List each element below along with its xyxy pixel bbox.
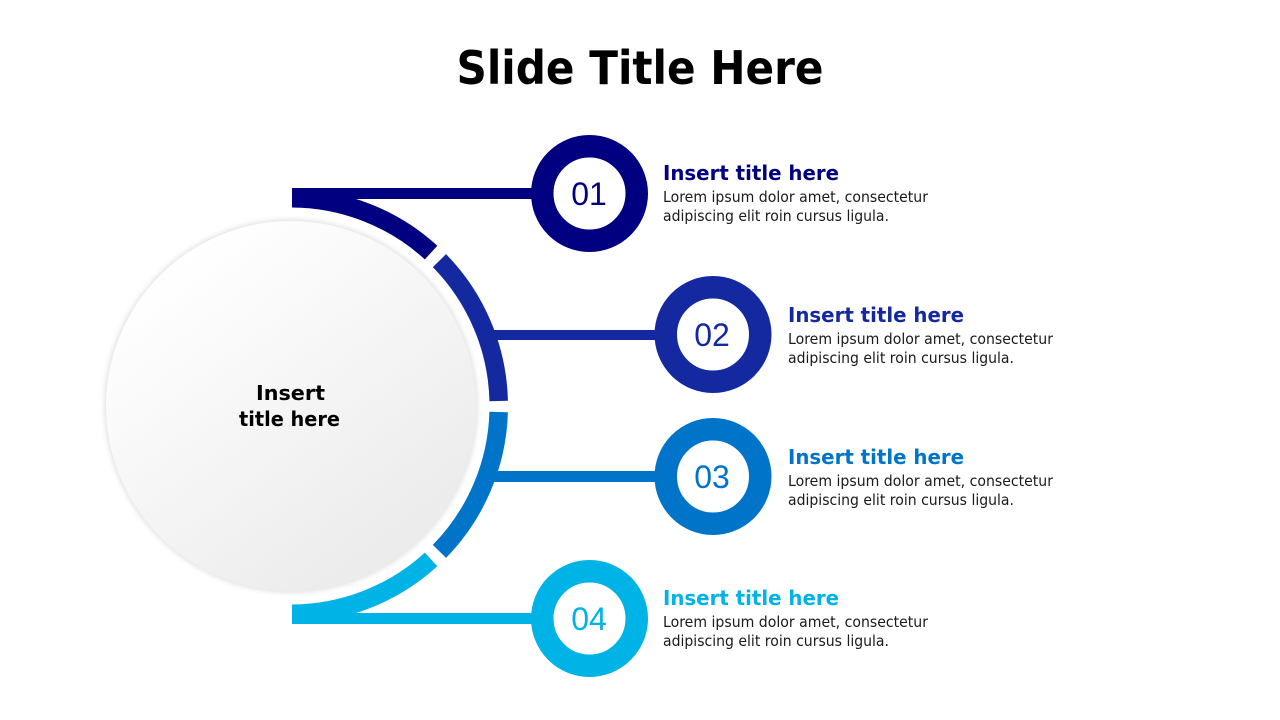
connector 01 (292, 188, 542, 199)
arc segment 02 (439, 261, 499, 401)
arc segment 04 (292, 559, 431, 614)
text block 03: Lorem ipsum dolor amet, consectetur (788, 472, 1054, 490)
ring 04 (542, 571, 637, 666)
number 04: 04 (571, 601, 607, 637)
item 02 (439, 261, 1054, 401)
text block 01 (663, 161, 929, 225)
text block 02 (788, 303, 1054, 367)
text block 02: Insert title here (788, 303, 964, 327)
item 01 (292, 146, 929, 253)
number 03: 03 (694, 459, 730, 495)
text block 01: adipiscing elit roin cursus ligula. (663, 207, 889, 225)
arc segment 03 (439, 412, 499, 551)
text block 03: adipiscing elit roin cursus ligula. (788, 491, 1014, 509)
text block 01: Lorem ipsum dolor amet, consectetur (663, 188, 929, 206)
text block 01: Insert title here (663, 161, 839, 185)
text block 02: Lorem ipsum dolor amet, consectetur (788, 330, 1054, 348)
text block 03: Insert title here (788, 445, 964, 469)
text block 03 (788, 445, 1054, 509)
central circle (105, 220, 477, 592)
central circle label: Insert (256, 381, 325, 405)
item 04 (292, 559, 929, 666)
number 02: 02 (694, 317, 730, 353)
connector 02 (490, 330, 665, 340)
text block 04: Insert title here (663, 586, 839, 610)
central circle label (239, 381, 340, 431)
ring 01 (542, 146, 637, 241)
number 01: 01 (571, 176, 607, 212)
central circle label: title here (239, 407, 340, 431)
ring 02 (666, 287, 760, 382)
item 03 (439, 412, 1054, 551)
text block 04: Lorem ipsum dolor amet, consectetur (663, 613, 929, 631)
arc segment 01 (292, 198, 431, 253)
text block 04: adipiscing elit roin cursus ligula. (663, 632, 889, 650)
ring 03 (666, 429, 760, 524)
connector 04 (292, 613, 542, 624)
connector 03 (490, 471, 665, 482)
title: Slide Title Here (456, 41, 824, 95)
text block 04 (663, 586, 929, 650)
text block 02: adipiscing elit roin cursus ligula. (788, 349, 1014, 367)
